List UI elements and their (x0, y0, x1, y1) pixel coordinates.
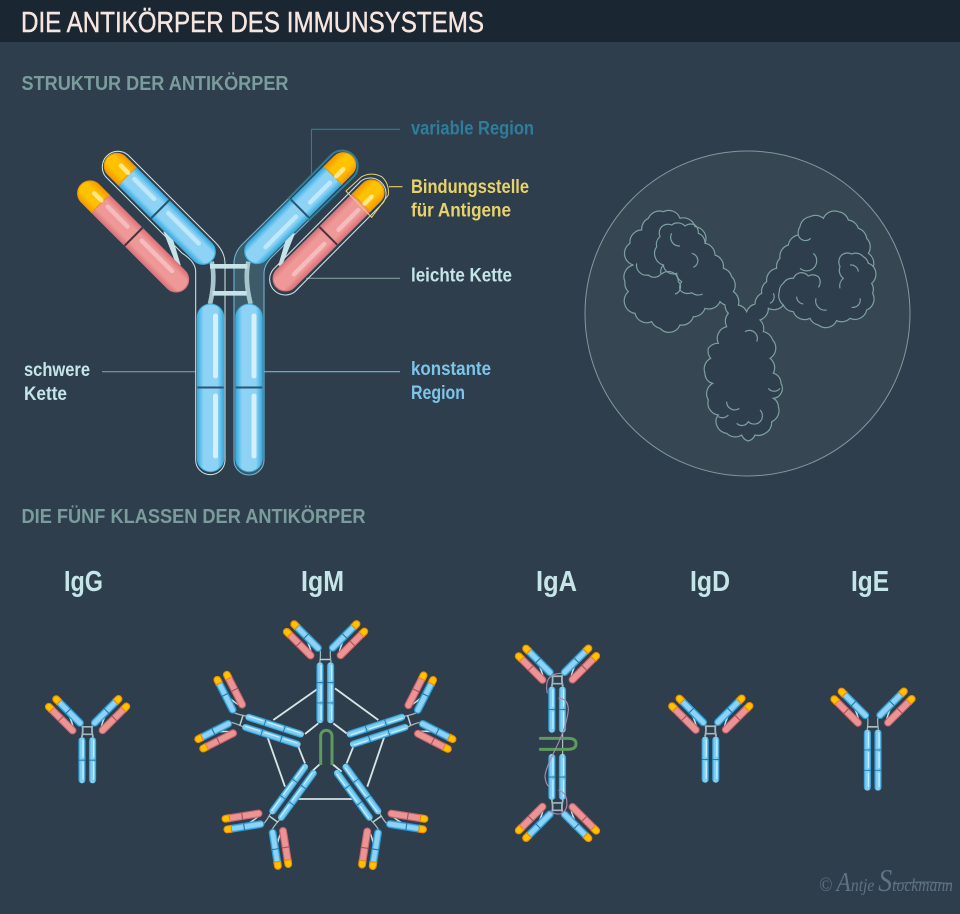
label: binding site (411, 177, 529, 222)
header bar (0, 0, 960, 42)
antibody molecule (72, 147, 389, 472)
label: light chain: leichte Kette (411, 266, 512, 286)
molecule cloud outline (624, 210, 876, 441)
large antibody diagram (72, 147, 389, 475)
diagram: IgE (829, 686, 917, 791)
label: constant region: konstante (411, 359, 491, 380)
label: heavy chain: Kette (24, 384, 67, 405)
IgM J chain (321, 730, 332, 765)
label: constant region: Region (411, 383, 465, 404)
heading: IgD: IgD (690, 566, 730, 598)
heading: five classes: DIE FÜNF KLASSEN DER ANTIKÖRPER (22, 505, 366, 528)
label: binding site: für Antigene (411, 200, 511, 222)
title: DIE ANTIKÖRPER DES IMMUNSYSTEMS (21, 7, 484, 39)
heading: IgM: IgM (301, 566, 344, 598)
diagram: IgG (44, 694, 131, 783)
diagram: IgM pentamer (190, 619, 461, 878)
panel: molecular surface circle (585, 151, 910, 476)
label: binding site: Bindungsstelle (411, 177, 529, 198)
label: constant region (411, 359, 491, 404)
diagram: IgD (667, 693, 754, 783)
IgM monomer units (190, 619, 461, 878)
IgA J chain and secretory piece (540, 673, 576, 814)
IgM connecting lines (267, 688, 384, 799)
signature: © Antje Stockmann (819, 862, 953, 898)
heading: IgA: IgA (536, 566, 577, 598)
binding site outline (346, 174, 388, 217)
diagram: IgA dimer (514, 643, 601, 843)
heading: structure: STRUKTUR DER ANTIKÖRPER (22, 72, 289, 95)
IgA lower unit (514, 754, 601, 843)
label: heavy chain (24, 360, 90, 405)
label: heavy chain: schwere (24, 360, 90, 381)
leader lines (102, 129, 402, 372)
heading: IgG: IgG (64, 566, 103, 598)
heading: IgE: IgE (851, 566, 889, 598)
IgA upper unit (514, 643, 601, 733)
label: variable region: variable Region (411, 118, 534, 140)
outlines of the chains (102, 151, 386, 475)
